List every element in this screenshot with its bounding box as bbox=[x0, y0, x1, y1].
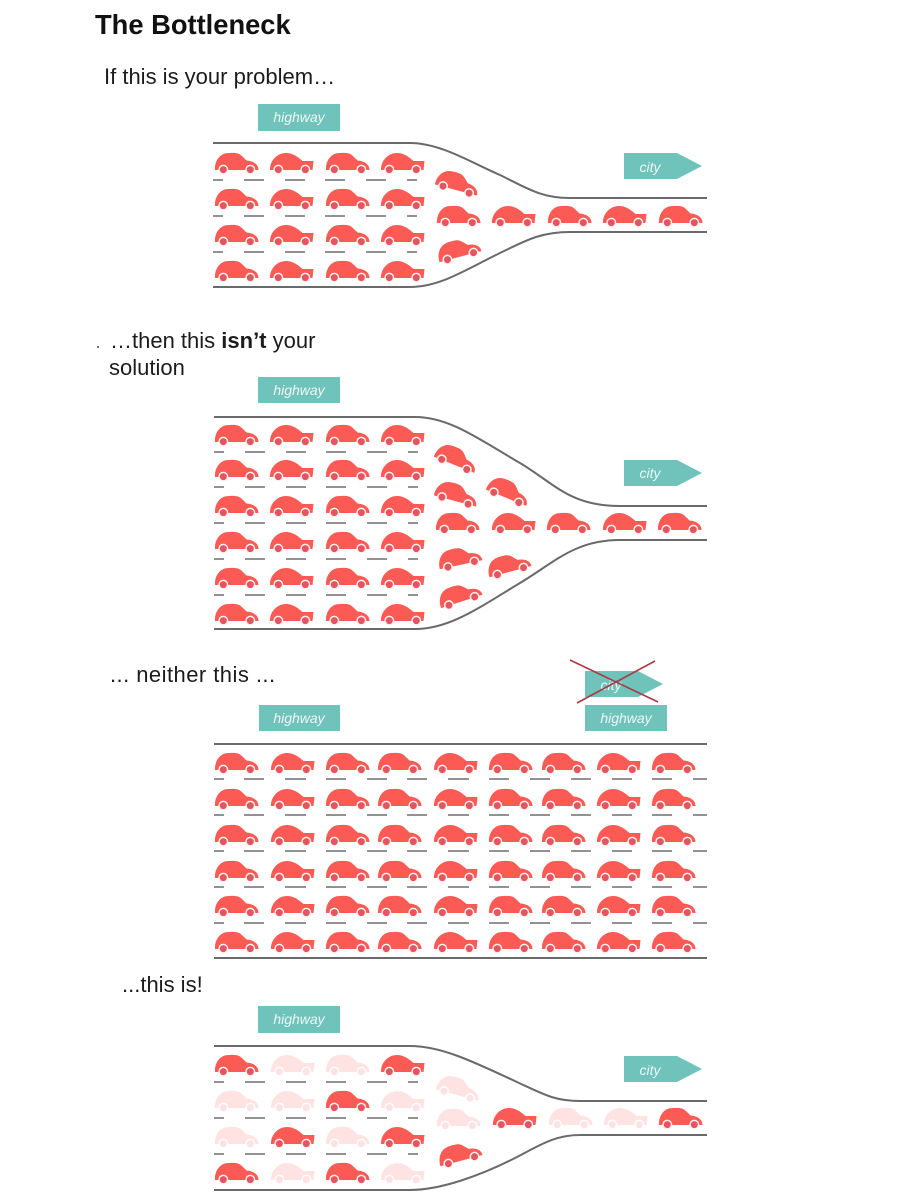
title: The Bottleneck bbox=[95, 9, 291, 40]
sign: city: city bbox=[640, 159, 662, 175]
heading: neither this: ... neither this ... bbox=[110, 662, 276, 687]
cars: faded bbox=[215, 1055, 648, 1185]
sign: highway: highway bbox=[273, 1011, 326, 1027]
sign: highway right bbox=[585, 705, 667, 731]
sign: highway left bbox=[259, 705, 340, 731]
road bbox=[214, 417, 707, 629]
road bbox=[213, 143, 707, 287]
heading: this is: ...this is! bbox=[122, 972, 203, 997]
cars: remaining bbox=[215, 1055, 702, 1185]
sign: city: city bbox=[640, 1062, 662, 1078]
sign: city bbox=[624, 153, 702, 179]
heading: problem: If this is your problem… bbox=[104, 64, 335, 89]
panel: fewer cars through bottleneck bbox=[214, 1006, 707, 1190]
road bbox=[214, 1046, 707, 1190]
lane markings bbox=[214, 779, 707, 923]
cars bbox=[215, 425, 702, 626]
sign: highway: highway bbox=[273, 382, 326, 398]
lane markings bbox=[214, 1082, 418, 1154]
road bbox=[214, 744, 707, 958]
sign: city crossed out: city bbox=[600, 677, 622, 693]
panel: bottleneck problem bbox=[213, 104, 707, 287]
heading: not the solution: …then this bbox=[110, 328, 221, 353]
lane markings bbox=[214, 452, 418, 595]
sign: highway bbox=[258, 104, 340, 131]
sign: highway bbox=[258, 377, 340, 403]
sign: highway: highway bbox=[273, 109, 326, 125]
panel: wider highway all the way bbox=[214, 660, 707, 958]
cars bbox=[215, 153, 702, 283]
heading: not the solution: solution bbox=[109, 355, 185, 380]
lane markings bbox=[213, 180, 417, 252]
sign: highway right: highway bbox=[600, 710, 653, 726]
sign: city bbox=[624, 460, 702, 486]
small dot bbox=[97, 346, 99, 348]
sign: city: city bbox=[640, 465, 662, 481]
panel: wider road into bottleneck bbox=[214, 377, 707, 629]
sign: highway left: highway bbox=[273, 710, 326, 726]
sign: highway bbox=[258, 1006, 340, 1033]
sign: city crossed out bbox=[570, 660, 663, 703]
heading: not the solution: isn’t your bbox=[221, 328, 315, 353]
cars bbox=[215, 753, 696, 954]
sign: city bbox=[624, 1056, 702, 1082]
